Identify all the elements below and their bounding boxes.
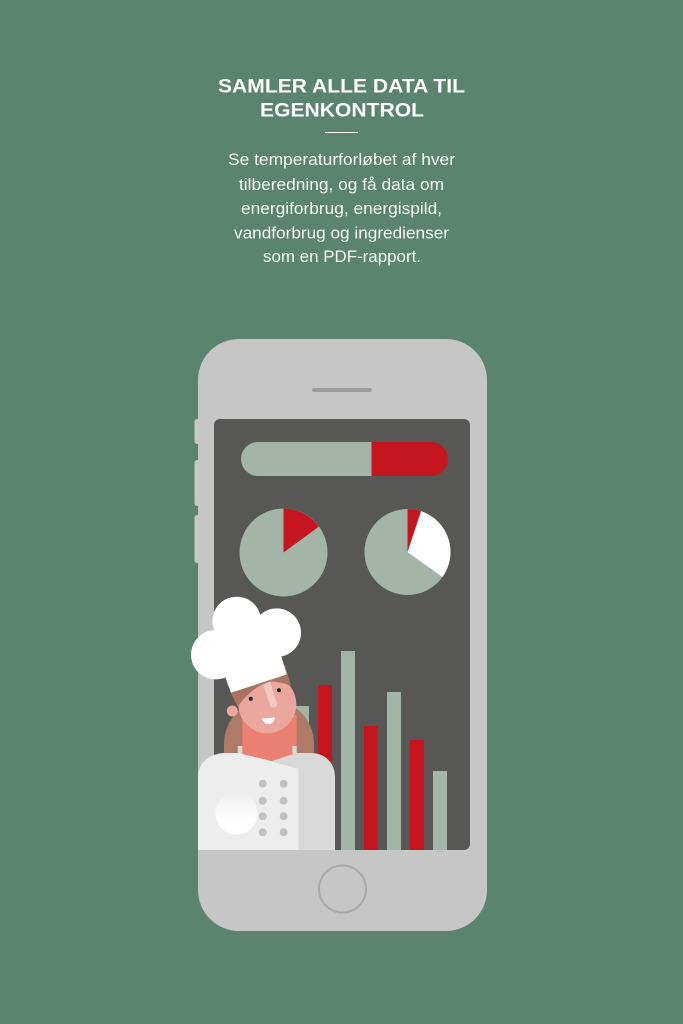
- title: EGENKONTROL: [260, 100, 424, 122]
- nose: [263, 682, 277, 708]
- pie chart right: [364, 509, 450, 595]
- progress bar: [241, 442, 448, 476]
- face: [238, 675, 296, 733]
- back hair: [224, 699, 314, 756]
- phone body: [198, 339, 487, 931]
- title: SAMLER ALLE DATA TIL: [218, 76, 465, 98]
- description text: energiforbrug, energispild,: [241, 199, 442, 218]
- chef illustration: [191, 597, 335, 850]
- phone side buttons: [194, 419, 202, 563]
- description text: Se temperaturforløbet af hver: [228, 150, 455, 169]
- eyes: [249, 688, 281, 701]
- coat: [198, 753, 335, 850]
- speaker: [312, 388, 372, 392]
- smile: [262, 717, 275, 724]
- phone: [194, 339, 487, 931]
- description text: som en PDF-rapport.: [263, 247, 421, 266]
- description text: [228, 150, 455, 266]
- coat buttons: [259, 780, 288, 836]
- home button: [319, 866, 366, 912]
- chef hat: [191, 597, 301, 693]
- collar tips: [238, 746, 297, 754]
- screen: [214, 419, 470, 850]
- neck: [242, 715, 297, 761]
- front hair: [229, 665, 291, 707]
- coat pocket highlight: [216, 792, 258, 834]
- description text: tilberedning, og få data om: [239, 175, 444, 194]
- ear: [227, 706, 238, 716]
- title: [218, 76, 465, 122]
- description text: vandforbrug og ingredienser: [234, 224, 449, 242]
- pie chart left: [240, 508, 328, 596]
- bar chart: [296, 651, 447, 850]
